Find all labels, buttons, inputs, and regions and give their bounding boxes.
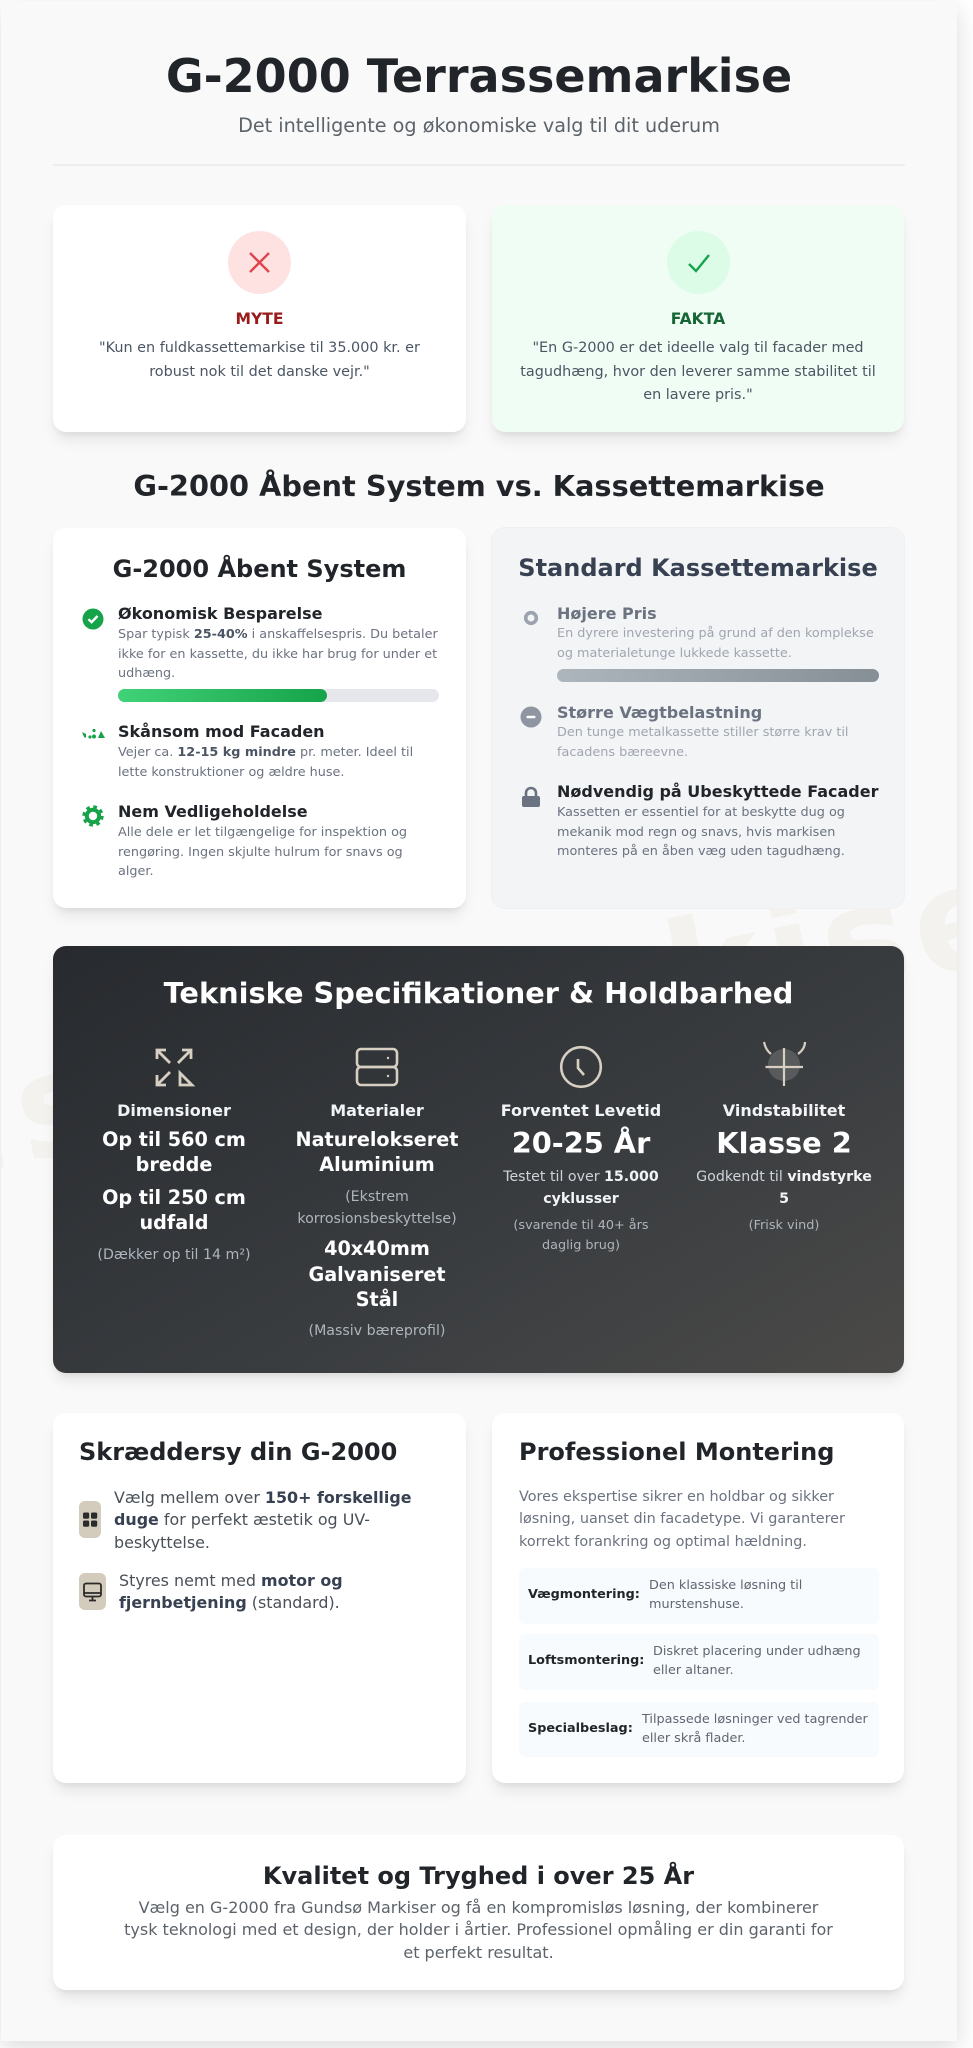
icon: clock [560, 1046, 602, 1088]
closing text: Vælg en G-2000 fra Gundsø Markiser og få en kompromisløs løsning, der kombinerer [139, 1898, 818, 1917]
bar fill [118, 689, 327, 702]
spec value: projection: udfald [139, 1211, 208, 1234]
icon: wind cross [763, 1042, 806, 1086]
icon: red cross [228, 231, 291, 294]
icon: fabric swatches [79, 1501, 101, 1538]
panel: quality closing [53, 1835, 904, 1990]
spec text [696, 1169, 872, 1207]
row label: Specialbeslag: [528, 1721, 633, 1736]
fabric text: duge for perfekt æstetik og UV- [114, 1510, 370, 1529]
panel: standard cassette awning [492, 528, 904, 908]
spec note [297, 1189, 457, 1227]
item text: facadens bæreevne. [557, 745, 688, 760]
motor text [119, 1571, 343, 1612]
item text: Den tunge metalkassette stiller større krav til [557, 725, 848, 740]
item text [557, 626, 874, 661]
spec text: Godkendt til vindstyrke [696, 1169, 872, 1185]
icon: padlock [522, 786, 540, 807]
item title: Nødvendig på Ubeskyttede Facader [557, 782, 878, 801]
row text: Diskret placering under udhæng [653, 1644, 861, 1659]
mounting intro [519, 1489, 845, 1550]
spec value: aluminium: Naturelokseret [296, 1128, 458, 1151]
spec note: (Ekstrem [345, 1189, 409, 1205]
icon: scattered weight marks [82, 728, 105, 739]
panel heading: Tekniske Specifikationer & Holdbarhed [164, 976, 793, 1010]
spec note: daglig brug) [542, 1238, 620, 1252]
myth label: MYTE [235, 310, 284, 328]
fact quote [520, 340, 876, 403]
item title: Skånsom mod Facaden [118, 722, 325, 741]
motor text: fjernbetjening (standard). [119, 1593, 340, 1612]
spec value: steel [308, 1237, 446, 1311]
spec value: width [102, 1128, 246, 1176]
icon: expand arrows [156, 1048, 196, 1086]
spec value: 20-25 År [512, 1126, 650, 1160]
title: G-2000 Terrassemarkise [166, 49, 792, 103]
panel: G-2000 open system [53, 528, 466, 908]
spec column: wind stability [696, 1042, 872, 1233]
icon: check badge [82, 608, 104, 630]
row text [642, 1712, 868, 1746]
closing text: tysk teknologi med et design, der holder i årtier. Professionel opmåling er din garanti for [124, 1920, 833, 1939]
fact label: FAKTA [671, 310, 725, 328]
spec value: width: bredde [136, 1153, 212, 1176]
fact quote: tagudhæng, hvor den leverer samme stabilitet til [520, 364, 876, 380]
panel: myth [53, 205, 466, 432]
spec text: cyklusser [543, 1191, 619, 1207]
spec note: korrosionsbeskyttelse) [297, 1211, 457, 1227]
row text [653, 1644, 861, 1678]
row label: Loftsmontering: [528, 1653, 644, 1668]
item text: Kassetten er essentiel for at beskytte dug og [557, 805, 845, 820]
watermark text: s [1, 1014, 118, 1197]
price bar [557, 669, 879, 682]
icon: ring [524, 610, 538, 626]
fabric text: Vælg mellem over 150+ forskellige [114, 1488, 411, 1507]
panel heading: Skræddersy din G-2000 [79, 1438, 397, 1466]
spec note: (Dækker op til 14 m²) [97, 1247, 251, 1263]
item text: Vejer ca. 12-15 kg mindre pr. meter. Ideel til [118, 745, 413, 760]
panel heading: G-2000 Åbent System [113, 555, 406, 583]
spec note: (svarende til 40+ års [513, 1218, 649, 1233]
row text: eller altaner. [653, 1663, 734, 1678]
row text: Den klassiske løsning til [649, 1578, 802, 1593]
fabric text: beskyttelse. [114, 1533, 210, 1552]
item text: alger. [118, 864, 154, 879]
spec note: (Frisk vind) [749, 1218, 819, 1233]
item title: Højere Pris [557, 604, 657, 623]
panel: fact [492, 205, 904, 432]
spec text: 5 [779, 1191, 789, 1207]
myth quote: "Kun en fuldkassettemarkise til 35.000 kr. er [99, 340, 420, 356]
spec note [513, 1218, 649, 1252]
mounting row: special brackets [519, 1702, 879, 1757]
icon: remote display [79, 1573, 106, 1610]
item text [118, 745, 413, 780]
mounting row: ceiling [519, 1634, 879, 1690]
item text [118, 825, 407, 879]
item text [118, 627, 438, 681]
spec value: aluminium [296, 1128, 458, 1176]
spec column: materials [296, 1048, 458, 1339]
icon: minus badge [520, 706, 542, 728]
panel heading: Professionel Montering [519, 1438, 834, 1466]
fact quote: "En G-2000 er det ideelle valg til facader med [532, 340, 864, 356]
savings bar [118, 689, 439, 702]
item text: lette konstruktioner og ældre huse. [118, 765, 344, 780]
spec value: steel: Stål [356, 1288, 398, 1311]
item text: og materialetunge lukkede kassette. [557, 646, 792, 661]
spec label: Forventet Levetid [501, 1101, 661, 1120]
mounting row: wall [519, 1568, 879, 1624]
closing text [53, 1897, 904, 1964]
item text [557, 805, 845, 859]
panel heading: Standard Kassettemarkise [518, 554, 878, 582]
spec label: Materialer [330, 1101, 424, 1120]
item text: mekanik mod regn og snavs, hvis markisen [557, 825, 835, 840]
panel: technical specifications [53, 946, 904, 1373]
spec value: steel: 40x40mm [324, 1237, 430, 1260]
item text: Spar typisk 25-40% i anskaffelsespris. Du betaler [118, 627, 438, 642]
spec value: aluminium: Aluminium [319, 1153, 435, 1176]
row label: Vægmontering: [528, 1587, 640, 1602]
spec text [503, 1169, 659, 1207]
row text: eller skrå flader. [642, 1731, 746, 1746]
row text: murstenshuse. [649, 1597, 744, 1612]
subtitle: Det intelligente og økonomiske valg til dit uderum [238, 114, 720, 137]
spec text: Testet til over 15.000 [503, 1169, 659, 1185]
item text: Alle dele er let tilgængelige for inspektion og [118, 825, 407, 840]
spec value: projection: Op til 250 cm [102, 1186, 246, 1209]
closing heading: Kvalitet og Tryghed i over 25 År [263, 1862, 694, 1890]
spec note: (Massiv bæreprofil) [309, 1323, 445, 1339]
closing text: et perfekt resultat. [403, 1943, 554, 1962]
motor text: Styres nemt med motor og [119, 1571, 343, 1590]
header divider [53, 164, 905, 166]
myth quote [99, 340, 420, 380]
item text: rengøring. Ingen skjulte hulrum for snavs og [118, 845, 403, 860]
icon: stacked server [356, 1048, 398, 1086]
panel: customise [53, 1413, 466, 1783]
spec column: lifetime [501, 1046, 661, 1252]
item text [557, 725, 848, 760]
fact quote: en lavere pris." [643, 387, 753, 403]
item text: ikke for en kassette, du ikke har brug for under et [118, 647, 437, 662]
icon: gear [82, 805, 104, 827]
mounting intro: korrekt forankring og optimal hældning. [519, 1534, 807, 1550]
item text: En dyrere investering på grund af den komplekse [557, 626, 874, 641]
myth quote: robust nok til det danske vejr." [149, 364, 370, 380]
spec value: steel: Galvaniseret [308, 1263, 446, 1286]
spec value: projection [102, 1186, 246, 1234]
item title: Større Vægtbelastning [557, 703, 762, 722]
spec value: width: Op til 560 cm [102, 1128, 246, 1151]
row text: Tilpassede løsninger ved tagrender [642, 1712, 868, 1727]
item title: Nem Vedligeholdelse [118, 802, 308, 821]
item text: monteres på en åben væg uden tagudhæng. [557, 844, 845, 859]
mounting intro: Vores ekspertise sikrer en holdbar og sikker [519, 1489, 834, 1505]
spec label: Vindstabilitet [723, 1101, 845, 1120]
spec value: Klasse 2 [716, 1126, 852, 1160]
item title: Økonomisk Besparelse [118, 604, 322, 623]
spec column: dimensions [97, 1048, 251, 1263]
item text: udhæng. [118, 666, 175, 681]
panel: professional mounting [492, 1413, 904, 1783]
mounting intro: løsning, uanset din facadetype. Vi garanterer [519, 1511, 845, 1527]
comparison heading: G-2000 Åbent System vs. Kassettemarkise [133, 469, 825, 503]
fabric text [114, 1488, 411, 1552]
spec label: Dimensioner [117, 1101, 231, 1120]
icon: green check [667, 231, 730, 294]
row text [649, 1578, 802, 1612]
